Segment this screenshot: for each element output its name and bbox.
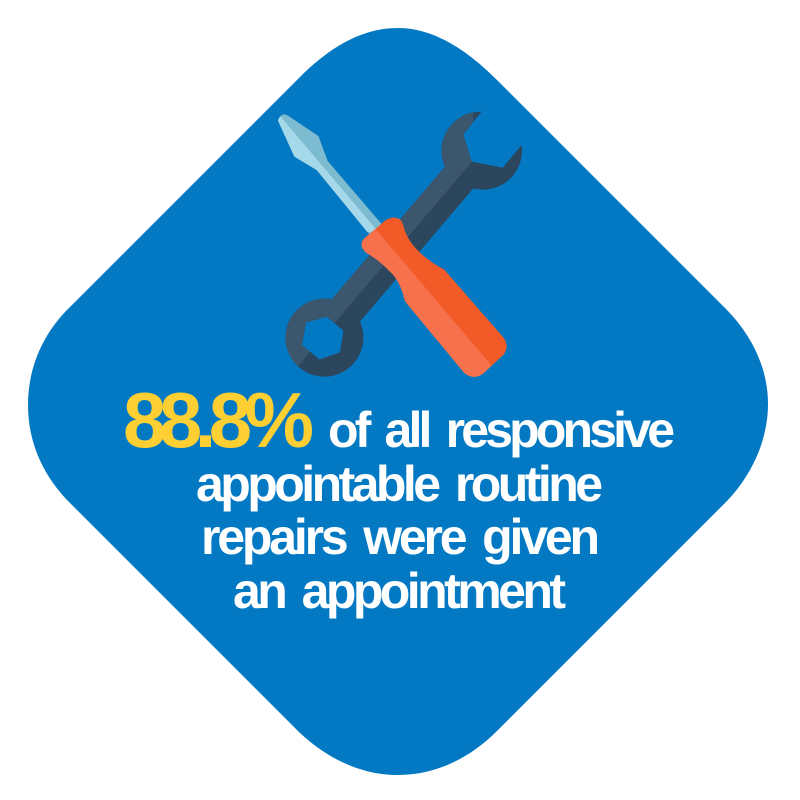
text: caption line 3: repairs were given xyxy=(201,509,600,565)
text: caption line 4: an appointment xyxy=(233,563,566,619)
text: caption line 2: appointable routine xyxy=(196,456,603,512)
icon: wrench xyxy=(285,112,522,377)
statistic: 88.8%: 88.8% xyxy=(123,376,314,464)
icon: crossed wrench and screwdriver xyxy=(278,112,522,377)
text: caption line 1: of all responsive xyxy=(328,402,675,458)
icon: screwdriver handle xyxy=(362,218,507,377)
icon: screwdriver blade xyxy=(278,114,383,236)
